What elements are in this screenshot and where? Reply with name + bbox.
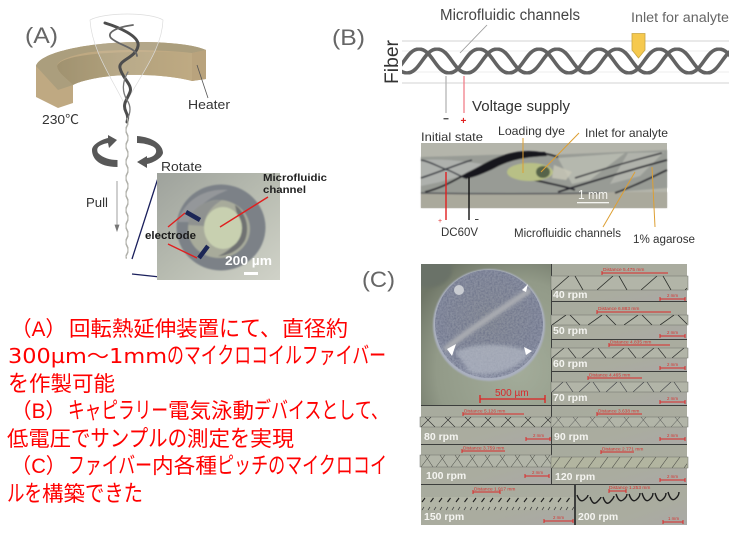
micrograph: 60 rpm: Distance 4.835 mm: [610, 340, 651, 346]
micrograph: 50 rpm: 50 rpm: [553, 325, 587, 337]
micrograph: 120 rpm: 120 rpm: [555, 471, 595, 483]
text block: red summary: ピッチのマイクロコイ: [217, 446, 387, 480]
micrograph: 40 rpm: Distance 5.475 mm: [603, 267, 644, 273]
text block: red summary: 直径約: [282, 318, 348, 341]
micrograph: 50 rpm: 2 mm: [667, 330, 678, 335]
micrograph: 200 rpm: 1 mm: [668, 516, 679, 521]
text block: red summary: でサンプルの: [71, 419, 187, 453]
photo: fiber cross-section: [421, 264, 551, 405]
label: Inlet for analyte: Inlet for analyte: [631, 10, 729, 25]
micrograph: 80 rpm: 2 mm: [533, 433, 544, 438]
micrograph: 90 rpm: 2 mm: [667, 433, 678, 438]
micrograph: 60 rpm: 2 mm: [667, 362, 678, 367]
micrograph: 150 rpm: [421, 485, 574, 525]
micrograph: 150 rpm: 150 rpm: [424, 511, 464, 523]
text block: red summary: できた: [85, 474, 143, 508]
text block: red summary: のマイクロコイルファイバー: [167, 336, 386, 370]
panel: A rotary heat drawing apparatus: [25, 14, 327, 280]
scale bar: 200 µm: 200 µm: [225, 253, 272, 268]
scale: 500 µm: 500 µm: [495, 388, 529, 399]
icon: analyte inlet marker: [632, 34, 645, 58]
micrograph: 40 rpm: [551, 264, 688, 301]
micrograph: 120 rpm: 2 mm: [667, 474, 678, 479]
heater ring: [36, 42, 206, 108]
micrograph: 80 rpm: Distance 5.126 mm: [464, 408, 505, 414]
label: (A): (A): [25, 23, 58, 48]
twisted microchannel strands: [105, 23, 138, 122]
text block: red summary: 作製可能: [29, 373, 115, 396]
micrograph: 200 rpm: Distance 1.253 mm: [609, 485, 650, 491]
text block: red summary: ファイバー: [68, 446, 152, 480]
micrograph: 100 rpm: Distance 3.759 mm: [463, 446, 504, 452]
micrograph: 70 rpm: Distance 4.465 mm: [589, 372, 630, 378]
red pointers: [168, 197, 268, 258]
icon: rotation arrows: [92, 135, 163, 168]
fiber diagram with double helix: [377, 41, 736, 83]
electrode leads: [445, 172, 447, 220]
polarity signs: [438, 218, 478, 225]
label: Voltage supply: Voltage supply: [472, 99, 571, 115]
photo: fiber cross-section inset: [145, 173, 327, 280]
text block: red summary: （C）: [11, 455, 66, 478]
micrograph: 40 rpm: 2 mm: [667, 293, 678, 298]
text block: red summary: ルを: [7, 474, 42, 508]
label: (C): (C): [362, 267, 395, 292]
panel: C coil pitch micrographs: [362, 252, 688, 525]
label: Inlet for analyte (photo): Inlet for analyte: [585, 126, 668, 140]
polarity signs: +: [460, 116, 466, 127]
micrograph: 80 rpm: [420, 406, 552, 444]
heater leader line: [197, 65, 208, 98]
text block: red summary: 構築: [42, 483, 85, 506]
label: Microfluidic channel: Microfluidic: [263, 173, 327, 184]
text block: red summary: デバイスとして、: [254, 391, 388, 425]
text block: red summary: （B）: [11, 400, 66, 423]
photo backing: [421, 264, 687, 525]
glass preform cone: [90, 14, 163, 105]
label: Fiber: Fiber: [382, 39, 403, 84]
text block: red summary: 300µm～1mm: [8, 344, 167, 368]
micrograph: 90 rpm: [551, 406, 688, 444]
label: (B): (B): [332, 25, 365, 50]
arrow: pull direction: [115, 181, 119, 231]
micrograph: 80 rpm: 80 rpm: [424, 431, 458, 443]
micrograph: 60 rpm: 60 rpm: [553, 358, 587, 370]
micrograph: 70 rpm: [551, 372, 688, 405]
micrograph: 100 rpm: 100 rpm: [426, 470, 466, 482]
label: Microfluidic channels (photo): Microfluidic channels: [514, 228, 621, 240]
label: electrode: electrode: [145, 230, 196, 242]
text block: red summary: 電気泳動: [168, 400, 254, 423]
text block: red summary: にて、: [219, 309, 281, 343]
micrograph: 150 rpm: 2 mm: [553, 515, 564, 520]
label: 230℃: 230℃: [42, 112, 79, 127]
micrograph: 200 rpm: 200 rpm: [578, 511, 618, 523]
text block: red summary: [7, 309, 388, 508]
label: DC60V: DC60V: [441, 225, 478, 239]
text block: red summary: （A）: [11, 318, 66, 341]
text block: red summary: を: [8, 364, 29, 398]
micrograph: 120 rpm: [551, 445, 688, 484]
panel: B capillary electrophoresis device: [332, 7, 736, 246]
text block: red summary: 低電圧: [7, 428, 71, 451]
label: Heater: Heater: [188, 97, 231, 112]
drawn fiber: [126, 118, 128, 258]
zoom guide lines: [132, 175, 160, 277]
micrograph: 100 rpm: [420, 445, 552, 484]
text block: red summary: 測定: [187, 428, 230, 451]
micrograph: 90 rpm: Distance 3.638 mm: [598, 408, 639, 414]
label: Loading dye: Loading dye: [498, 124, 565, 138]
micrograph: 90 rpm: 90 rpm: [554, 431, 588, 443]
scale: 500 µm: [480, 388, 545, 403]
micrograph: 200 rpm: [576, 485, 687, 525]
orange leader lines: [523, 133, 655, 227]
micrograph: 40 rpm: 40 rpm: [553, 289, 587, 301]
micrograph: 120 rpm: Distance 2.771 mm: [602, 446, 643, 452]
electrodes: [186, 212, 208, 258]
photo: fiber cross-section inset: channel: [263, 185, 306, 196]
polarity signs: [444, 116, 466, 127]
photo: electrophoresis fiber: [421, 143, 667, 208]
text block: red summary: 実現: [250, 428, 294, 451]
micrograph: 100 rpm: 2 mm: [532, 470, 543, 475]
text block: red summary: 回転熱延伸装置: [69, 318, 219, 341]
leader: microfluidic channels: [460, 25, 487, 53]
text block: red summary: を: [230, 419, 250, 453]
micrograph: 70 rpm: 70 rpm: [553, 392, 587, 404]
label: Pull: Pull: [86, 195, 108, 210]
text block: red summary: キャピラリー: [68, 391, 168, 425]
label: 1% agarose: 1% agarose: [633, 234, 695, 246]
voltage leads: [445, 76, 447, 113]
micrograph: 50 rpm: Distance 6.883 mm: [598, 306, 639, 312]
scale bar: 1 mm: 1 mm: [578, 188, 608, 202]
micrograph: 70 rpm: 2 mm: [667, 396, 678, 401]
label: Initial state: Initial state: [421, 130, 483, 144]
micrograph: 150 rpm: Distance 1.917 mm: [474, 486, 515, 492]
micrograph: 50 rpm: [551, 302, 688, 339]
label: Rotate: Rotate: [161, 159, 202, 174]
micrograph: 60 rpm: [551, 340, 688, 371]
text block: red summary: 内各種: [152, 455, 217, 478]
label: Microfluidic channels: Microfluidic channels: [440, 7, 580, 24]
polarity signs: +: [438, 218, 442, 225]
